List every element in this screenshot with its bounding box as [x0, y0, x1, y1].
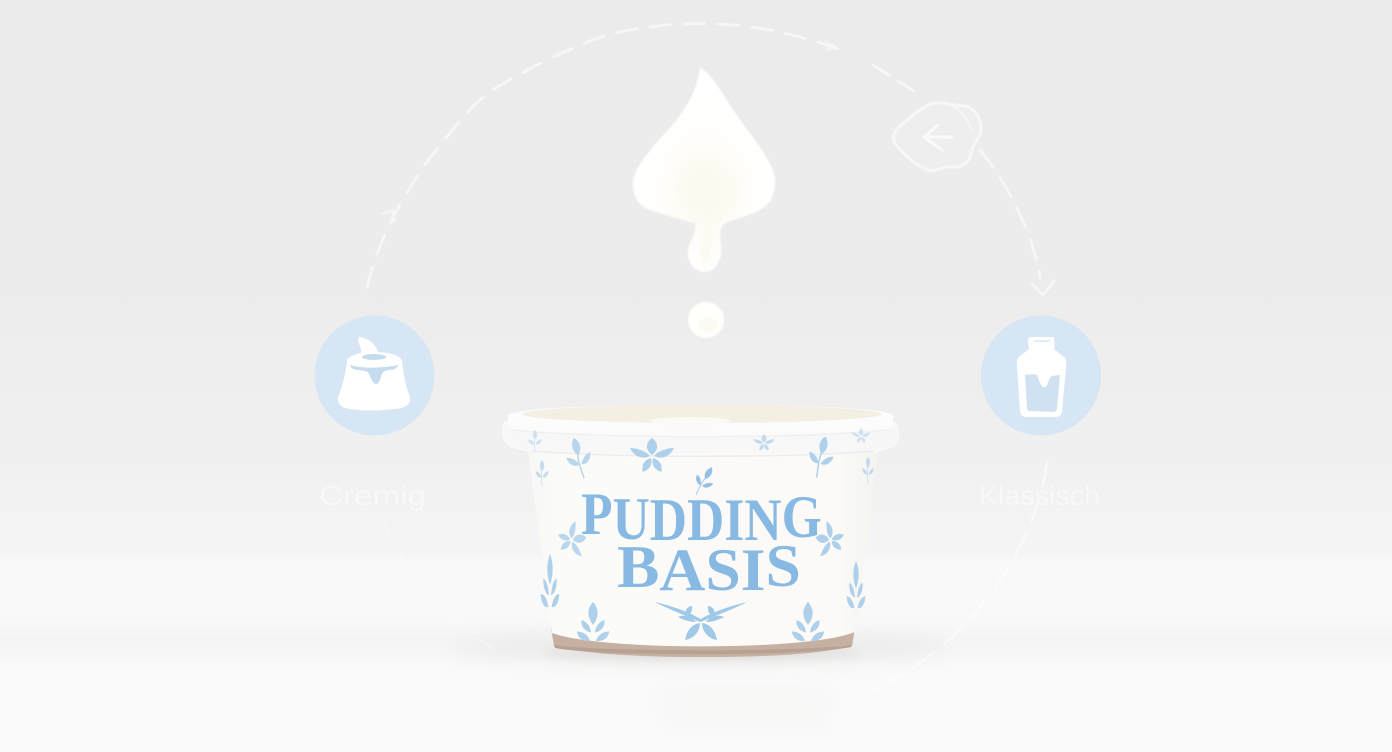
icon: pudding (Cremig)	[314, 316, 434, 436]
background wall	[0, 0, 1392, 562]
arrowhead: left arc	[382, 210, 394, 222]
lid edge line	[512, 430, 890, 437]
cup laurel ornament	[655, 602, 747, 640]
icon: small droplet	[688, 302, 724, 338]
cup title: PUDDING: PUDDING	[581, 481, 822, 554]
cup floral pattern	[528, 428, 874, 641]
icon: return arrow blob	[893, 103, 981, 170]
pudding surface	[522, 405, 882, 423]
cup shadow	[542, 647, 862, 659]
dashed cycle arc: toward right icon	[980, 150, 1040, 278]
cup title: BASIS: BASIS	[617, 534, 801, 604]
arrowhead: lower right	[871, 679, 886, 694]
cup body	[527, 445, 879, 646]
arrowhead: right arc	[1032, 281, 1054, 295]
dashed cycle arc: lower left	[384, 520, 500, 652]
label: Cremig: Cremig	[319, 480, 426, 511]
cup: pudding tub	[502, 405, 898, 659]
floor surface	[0, 558, 1392, 752]
dashed cycle arc: left to top	[367, 24, 847, 287]
dashed cycle arc: lower right	[875, 462, 1047, 689]
icon: cream drop	[633, 67, 775, 272]
lid flange	[502, 422, 898, 455]
arrowhead: top arc	[825, 41, 835, 50]
cup base	[551, 628, 855, 657]
dashed cycle arc: top to right	[873, 65, 917, 93]
lid rim	[508, 405, 893, 438]
label: Klassisch: Klassisch	[979, 480, 1100, 511]
icon: bottle (Klassisch)	[981, 316, 1101, 436]
